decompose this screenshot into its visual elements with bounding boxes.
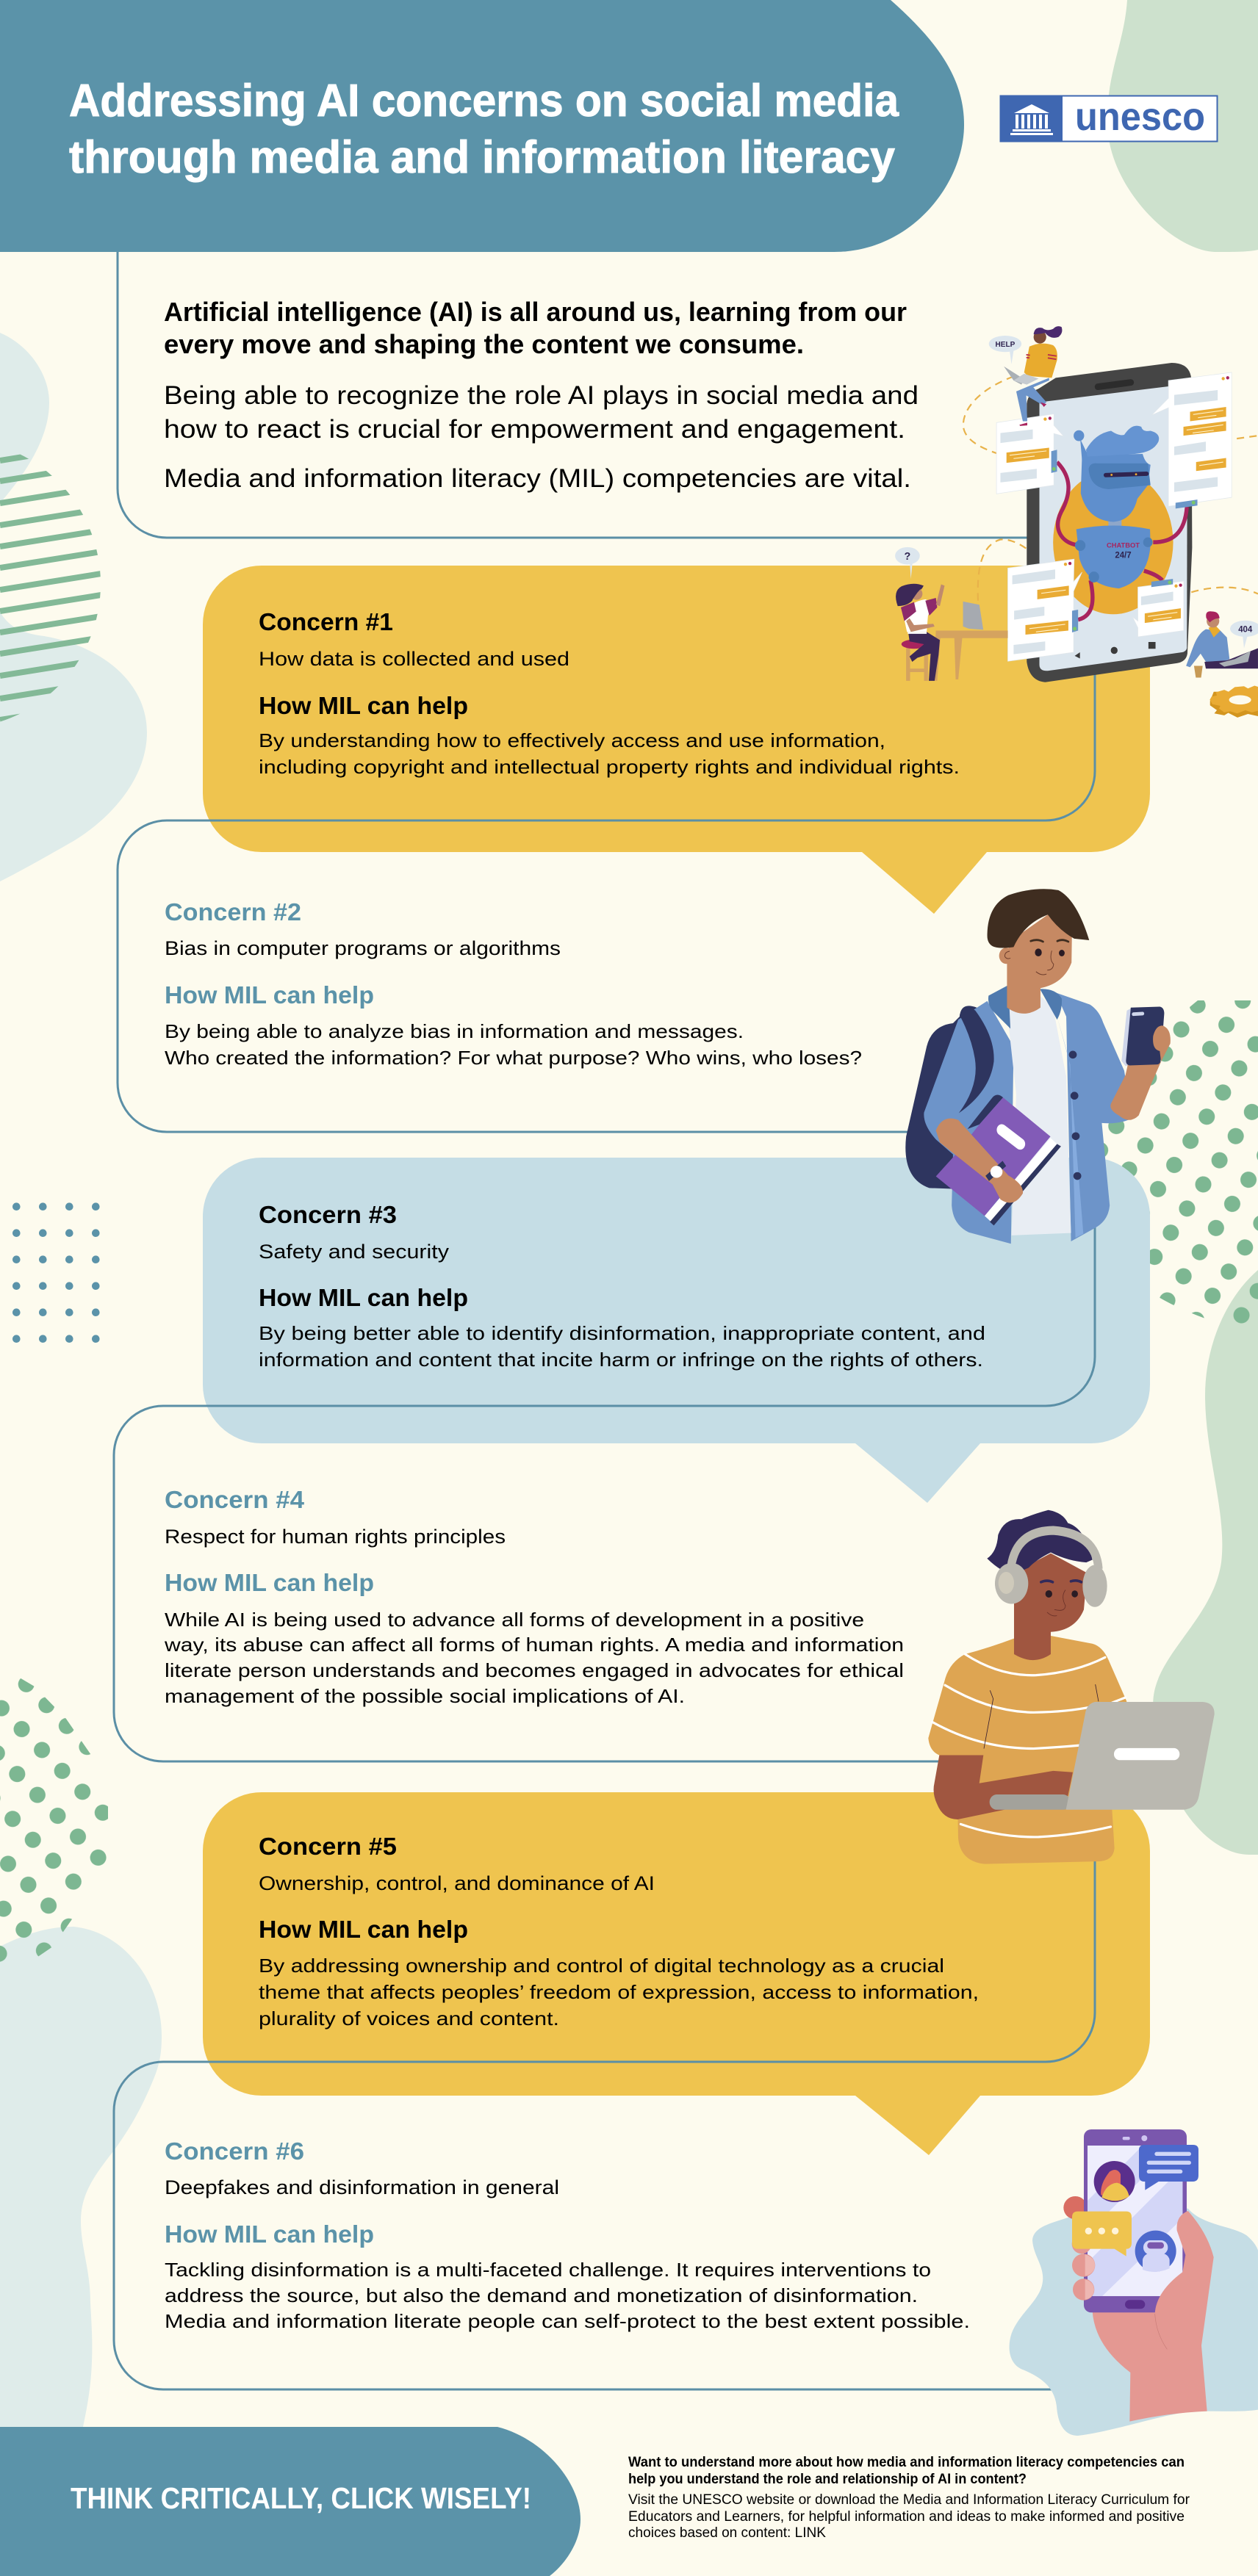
concern 5 text: plurality of voices and content. (259, 2007, 559, 2030)
background dots: right (1095, 1000, 1258, 1330)
thumb (1153, 1025, 1171, 1061)
footer slogan: THINK CRITICALLY, CLICK WISELY! (71, 2481, 531, 2515)
intro paragraph (164, 381, 919, 493)
concern 5 text: How MIL can help (259, 1916, 468, 1943)
concern 1 text: How data is collected and used (259, 648, 569, 670)
woman with laptop on top of the phone: HELP (996, 341, 1015, 349)
robot (1074, 426, 1159, 588)
UNESCO logo: unesco (1075, 95, 1205, 139)
text: concern 4: While AI is being used to advance all forms of development in a positive (165, 1609, 864, 1631)
face details (1041, 1581, 1082, 1582)
intro bold statement: Artificial intelligence (AI) is all around us, learning from our (164, 297, 907, 327)
text: concern 2: Bias in computer programs or algorithms (165, 937, 561, 959)
intro text (164, 297, 919, 493)
robot arms (1057, 462, 1187, 620)
collar (988, 985, 1062, 1028)
text: concern 2: How MIL can help (165, 981, 374, 1009)
laptop (990, 1794, 1071, 1810)
text: concern 4: Respect for human rights principles (165, 1526, 506, 1548)
concern 3 text: Concern #3 (259, 1201, 397, 1228)
text: concern 4 (164, 1486, 904, 1707)
woman with laptop on top of the phone (989, 326, 1062, 426)
pale blue blob (1010, 2209, 1258, 2436)
text: concern 2: By being able to analyze bias in information and messages. (165, 1020, 744, 1042)
outline: intro box (118, 252, 1043, 538)
text: concern 6 (165, 2137, 970, 2332)
t-shirt (1007, 995, 1071, 1235)
phone in hand (1121, 1008, 1132, 1066)
text: concern 6: Concern #6 (165, 2137, 304, 2165)
orange circle (1053, 470, 1173, 614)
concern 5 text: Ownership, control, and dominance of AI (259, 1872, 655, 1894)
gear (1210, 686, 1258, 718)
footer question (628, 2455, 1185, 2487)
hair (987, 1510, 1093, 1574)
intro paragraph: Being able to recognize the role AI plays in social media and (164, 381, 919, 410)
backpack (905, 1006, 993, 1189)
illustration: chatbot phone (895, 326, 1258, 718)
buttons (1069, 1051, 1077, 1058)
outline: concern 4 box (114, 1190, 1095, 1761)
arm with watch (936, 1119, 1023, 1202)
text: concern 4: literate person understands and becomes engaged in advocates for ethical (165, 1659, 904, 1681)
footer question: Want to understand more about how media and information literacy competencies can (628, 2455, 1185, 2470)
outline: concern 6 box (114, 1858, 1095, 2389)
footer call to action (628, 2492, 1190, 2541)
dashed connectors (963, 376, 1258, 601)
avatar woman (1094, 2161, 1135, 2202)
man on the floor (1186, 611, 1258, 677)
background blob: right middle green (1153, 1270, 1258, 1855)
woman at desk: ? (905, 551, 910, 563)
background blob: lower left pale (0, 1927, 162, 2427)
text: concern 6: Media and information literate people can self-protect to the best extent possible. (165, 2310, 970, 2332)
back finger (1063, 2196, 1087, 2219)
text: concern 4: management of the possible social implications of AI. (165, 1685, 685, 1707)
concern 5 text: Concern #5 (259, 1833, 397, 1860)
illustration: student with book and phone (905, 889, 1171, 1244)
yellow chat bubble (1072, 2212, 1132, 2256)
title: Addressing AI concerns on social media (69, 76, 899, 126)
outline: concern 2 box (118, 661, 1095, 1132)
footer question: help you understand the role and relationship of AI in content? (628, 2472, 1027, 2487)
neck and face (1014, 1554, 1087, 1660)
concern 1 text: Concern #1 (259, 608, 393, 635)
concern 1 text: including copyright and intellectual property rights and individual rights. (259, 756, 960, 778)
header banner (0, 0, 964, 252)
panel: concern 3 (203, 1158, 1150, 1503)
text: concern 6: address the source, but also the demand and monetization of disinformation. (165, 2284, 918, 2306)
robot: 24/7 (1115, 550, 1132, 560)
concern 1 text: How MIL can help (259, 692, 468, 719)
head and neck (1007, 914, 1072, 1014)
chat bubbles orange (1007, 407, 1226, 635)
concern 1 text (259, 608, 960, 778)
text: concern 6: How MIL can help (165, 2220, 374, 2248)
robot: CHATBOT (1107, 541, 1140, 550)
text: concern 4: How MIL can help (165, 1569, 374, 1596)
concern 3 text (259, 1201, 985, 1371)
concern 5 text: theme that affects peoples’ freedom of expression, access to information, (259, 1981, 979, 2003)
concern 3 text: information and content that incite harm or infringe on the rights of others. (259, 1349, 983, 1371)
illustration: hand holding phone (1010, 2129, 1258, 2436)
avatar robot (1135, 2231, 1176, 2272)
concern 3 text: How MIL can help (259, 1284, 468, 1311)
footer call to action: Visit the UNESCO website or download the Media and Information Literacy Curriculum for (628, 2492, 1190, 2508)
background blob: upper left pale (0, 333, 147, 881)
concern 3 text: Safety and security (259, 1241, 450, 1263)
text: concern 2 (165, 898, 862, 1069)
concern 3 text: By being better able to identify disinformation, inappropriate content, and (259, 1322, 985, 1344)
connectors (1052, 450, 1198, 632)
concern 5 text (259, 1833, 979, 2030)
blue chat bubble (1139, 2145, 1198, 2190)
intro bold statement (164, 297, 907, 359)
panel: concern 5 (203, 1792, 1150, 2155)
text: concern 2: Who created the information? For what purpose? Who wins, who loses? (165, 1047, 862, 1069)
panel: concern 1 (203, 566, 1150, 914)
background dots: left (0, 1677, 108, 1969)
forearm (1110, 1061, 1161, 1120)
shirt (928, 1636, 1126, 1864)
illustration: person with headphones and laptop (928, 1510, 1215, 1864)
palm (1093, 2211, 1214, 2422)
intro bold statement: every move and shaping the content we consume. (164, 329, 804, 359)
background dots: teal grid (12, 1202, 100, 1343)
man on the floor: 404 (1238, 625, 1253, 635)
background blob: top right green (1107, 0, 1258, 252)
footer note (628, 2455, 1190, 2541)
bubble text lines (1010, 411, 1223, 632)
UNESCO logo (1000, 95, 1217, 142)
intro paragraph: Media and information literacy (MIL) competencies are vital. (164, 464, 911, 493)
stripes (932, 1654, 1126, 1837)
headphones (1011, 1531, 1099, 1569)
phone front (1126, 1007, 1164, 1066)
footer call to action: choices based on content: LINK (628, 2525, 826, 2541)
title (69, 76, 899, 183)
phone frame (1084, 2129, 1187, 2312)
intro paragraph: how to react is crucial for empowerment and engagement. (164, 415, 905, 444)
jacket (924, 1001, 1013, 1244)
chat cards (996, 372, 1232, 661)
text: concern 6: Deepfakes and disinformation in general (165, 2176, 559, 2198)
text: concern 4: Concern #4 (165, 1486, 305, 1513)
text: concern 4: way, its abuse can affect all forms of human rights. A media and information (164, 1634, 904, 1656)
thumb (1155, 2211, 1214, 2316)
concern 5 text: By addressing ownership and control of digital technology as a crucial (259, 1955, 944, 1977)
footer call to action: Educators and Learners, for helpful information and ideas to make informed and positive (628, 2509, 1185, 2525)
footer banner (0, 2427, 581, 2576)
forearm (934, 1755, 1073, 1819)
concern 1 text: By understanding how to effectively access and use information, (259, 729, 885, 751)
book (968, 1095, 1003, 1129)
chat bubbles grey (1000, 390, 1218, 654)
text: concern 2: Concern #2 (165, 898, 301, 926)
woman at desk (895, 547, 1007, 681)
phone body (1027, 363, 1192, 682)
title: through media and information literacy (69, 132, 896, 183)
text: concern 6: Tackling disinformation is a multi-faceted challenge. It requires interventions to (165, 2259, 931, 2281)
background stripes circle (0, 454, 101, 721)
fingers (1072, 2254, 1095, 2277)
